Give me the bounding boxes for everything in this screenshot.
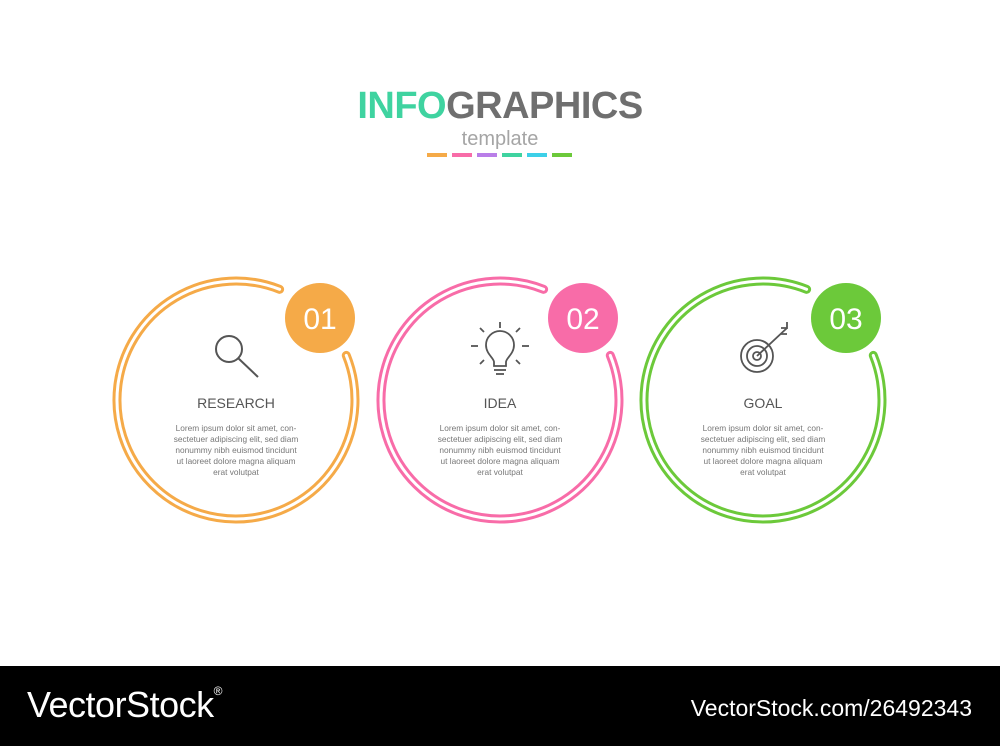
- panel: goal: nonummy nibh euismod tincidunt: [702, 445, 824, 455]
- panel: goal: [644, 281, 882, 519]
- panel: idea: erat volutpat: [477, 467, 524, 477]
- panel: idea: nonummy nibh euismod tincidunt: [439, 445, 561, 455]
- panel: research: [117, 281, 355, 519]
- panel: idea: IDEA: [484, 395, 517, 411]
- panel: goal: erat volutpat: [740, 467, 787, 477]
- panel: goal: Lorem ipsum dolor sit amet, con-: [703, 423, 824, 433]
- panel: research: 01: [303, 303, 337, 336]
- subtitle: template: [462, 128, 538, 150]
- panel: idea: Lorem ipsum dolor sit amet, con-: [440, 423, 561, 433]
- panel: goal: sectetuer adipiscing elit, sed diam: [701, 434, 825, 444]
- panel: goal: GOAL: [744, 395, 783, 411]
- footer bar: [0, 666, 1000, 746]
- panel: idea: 02: [566, 303, 600, 336]
- panel: goal: ut laoreet dolore magna aliquam: [704, 456, 823, 466]
- panel: research: nonummy nibh euismod tincidunt: [175, 445, 297, 455]
- panel: research: Lorem ipsum dolor sit amet, con-: [176, 423, 297, 433]
- footer url: VectorStock.com/26492343: [691, 695, 972, 721]
- panel: research: RESEARCH: [197, 395, 275, 411]
- panel: research: ut laoreet dolore magna aliquam: [176, 456, 296, 466]
- panel: idea: ut laoreet dolore magna aliquam: [440, 456, 560, 466]
- panel: idea: [381, 281, 619, 519]
- panel: research: erat volutpat: [213, 467, 260, 477]
- title: INFOGRAPHICS: [357, 85, 643, 127]
- panel: idea: sectetuer adipiscing elit, sed diam: [438, 434, 562, 444]
- footer logo: VectorStock®: [27, 684, 222, 725]
- panel: research: sectetuer adipiscing elit, sed diam: [174, 434, 298, 444]
- panel: goal: 03: [829, 303, 863, 336]
